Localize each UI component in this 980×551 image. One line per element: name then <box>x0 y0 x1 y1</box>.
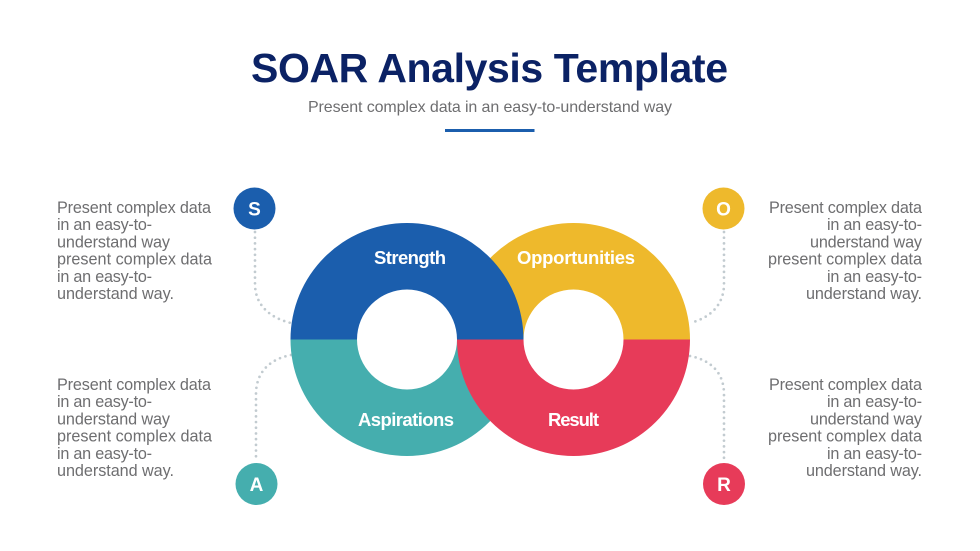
text block: Aspirations description: understand way <box>57 410 171 428</box>
connector: O <box>690 232 724 323</box>
badge: A <box>236 463 278 505</box>
text block: Aspirations description <box>57 376 212 480</box>
text block: Strength description: in an easy-to- <box>57 216 152 234</box>
badge: R: R <box>717 475 731 496</box>
text block: Result description <box>768 376 923 480</box>
text block: Opportunities description: Present complex data <box>769 199 922 217</box>
text block: Opportunities description: understand way <box>810 233 923 251</box>
badge: S <box>234 188 276 230</box>
text block: Opportunities description: understand way. <box>806 285 922 303</box>
text block: Result description: in an easy-to- <box>827 393 922 411</box>
text block: Result description: Present complex data <box>769 376 922 394</box>
text block: Result description: understand way. <box>806 462 922 480</box>
badge: O <box>702 188 744 230</box>
title underline <box>445 129 534 132</box>
badge: R <box>703 463 745 505</box>
label: Aspirations: Aspirations <box>358 409 454 430</box>
text block: Aspirations description: understand way. <box>57 462 174 480</box>
text block: Result description: understand way <box>810 410 923 428</box>
text block: Opportunities description <box>768 199 923 303</box>
badge: S: S <box>248 200 261 220</box>
text block: Aspirations description: in an easy-to- <box>57 393 152 411</box>
text block: Opportunities description: in an easy-to- <box>827 216 922 234</box>
text block: Aspirations description: Present complex data <box>57 376 211 394</box>
connector: R <box>690 356 724 458</box>
text block: Result description: present complex data <box>768 428 922 446</box>
text block: Strength description: in an easy-to- <box>57 268 152 286</box>
badge: O: O <box>716 200 731 220</box>
connector: S <box>255 232 291 323</box>
segment: Strength <box>290 223 524 340</box>
segment: Opportunities <box>457 223 690 340</box>
text block: Strength description: present complex data <box>57 251 212 269</box>
segment: Result <box>457 340 690 456</box>
label: Result: Result <box>548 409 599 430</box>
diagram: infinity of four ring segments <box>290 223 690 456</box>
badge: A: A <box>250 475 264 496</box>
segment: Aspirations <box>290 340 524 456</box>
connector: A <box>256 355 291 458</box>
text block: Aspirations description: present complex data <box>57 428 212 446</box>
subtitle: Present complex data in an easy-to-understand way <box>308 99 672 116</box>
text block: Opportunities description: present complex data <box>768 251 922 269</box>
text block: Result description: in an easy-to- <box>827 445 922 463</box>
text block: Strength description: understand way. <box>57 285 174 303</box>
text block: Strength description: understand way <box>57 233 171 251</box>
title: SOAR Analysis Template <box>251 45 728 91</box>
text block: Aspirations description: in an easy-to- <box>57 445 152 463</box>
text block: Strength description: Present complex data <box>57 199 211 217</box>
label: Strength: Strength <box>374 247 446 268</box>
text block: Opportunities description: in an easy-to- <box>827 268 922 286</box>
label: Opportunities: Opportunities <box>517 247 635 268</box>
text block: Strength description <box>57 199 212 303</box>
